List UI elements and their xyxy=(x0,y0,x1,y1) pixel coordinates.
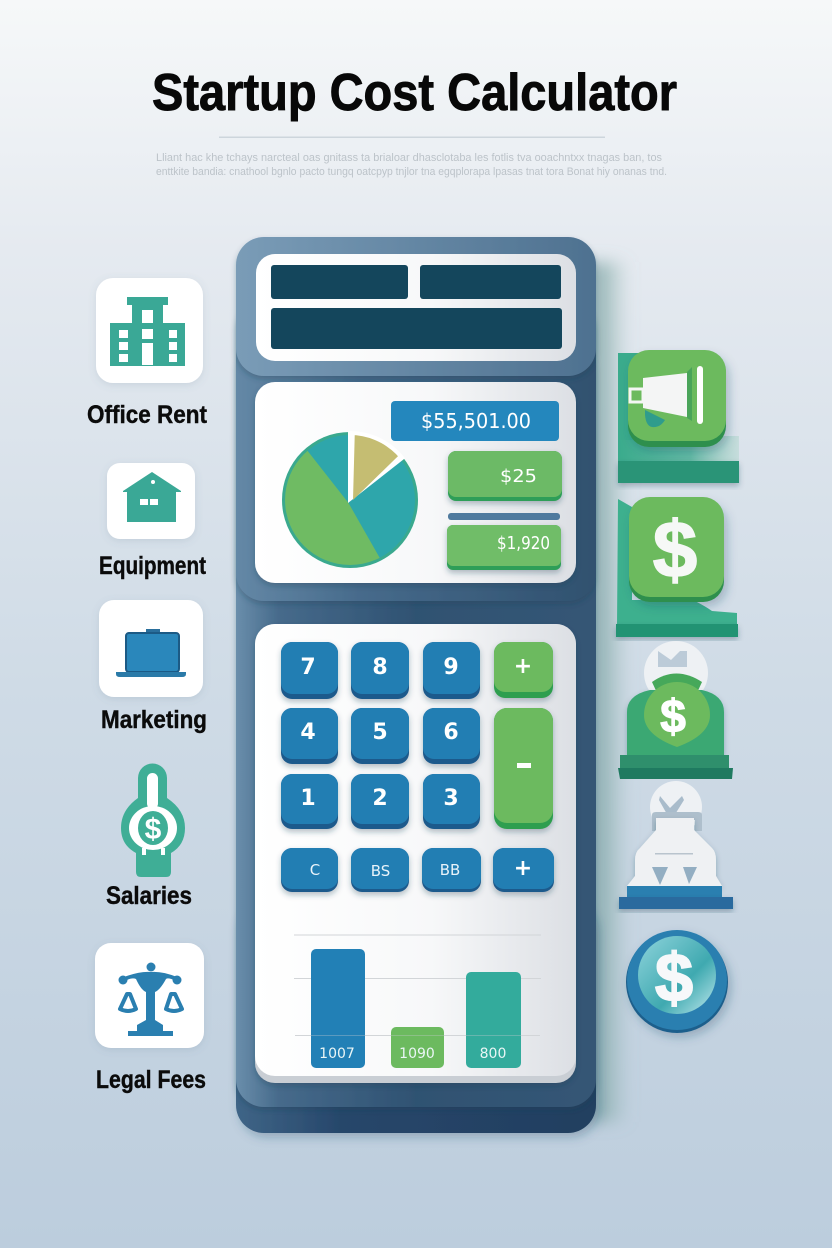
title: Startup Cost Calculator xyxy=(152,64,677,122)
bar chart: 1090 xyxy=(399,1046,435,1062)
keypad: 3 xyxy=(443,786,459,811)
keypad: 9 xyxy=(443,655,459,680)
icon: equipment xyxy=(107,463,195,539)
total value field xyxy=(391,401,559,441)
value button 1 xyxy=(448,451,562,501)
icon: dollar coin xyxy=(626,930,728,1033)
display screen xyxy=(256,254,576,361)
calculator top cap xyxy=(236,237,596,376)
pie chart xyxy=(282,432,418,568)
label: office rent: Office Rent xyxy=(87,401,208,429)
keypad: + xyxy=(514,654,532,679)
icon: bank stand xyxy=(619,781,733,909)
value button 2 xyxy=(447,525,561,570)
subtitle text: Lliant hac khe tchays narcteal oas gnitass ta brialoar dhasclotaba les fotlis tva ooachntxx tnagas ban, tos xyxy=(156,152,662,164)
keypad: 2 xyxy=(372,786,388,811)
label: salaries: Salaries xyxy=(106,882,192,910)
total value field: $55,501.00 xyxy=(421,409,531,433)
keypad: 6 xyxy=(443,720,459,745)
subtitle text: enttkite bandia: cnathool bgnlo pacto tungq oatcpyp tnjlor tna egqplorapa lpasas tnat tora Bonat hiy onanas tnd. xyxy=(156,166,667,178)
keypad: 7 xyxy=(300,655,316,680)
label: legal fees: Legal Fees xyxy=(96,1066,206,1094)
icon: megaphone xyxy=(618,350,739,483)
keypad: 4 xyxy=(300,720,316,745)
value button 2: $1,920 xyxy=(497,533,550,554)
bar chart: 800 xyxy=(480,1046,506,1062)
icon: dollar card xyxy=(616,497,738,637)
icon: legal fees xyxy=(95,943,204,1048)
label: equipment: Equipment xyxy=(99,552,207,580)
keypad: 8 xyxy=(372,655,388,680)
icon: money bag: $ xyxy=(660,690,686,742)
icon: office rent xyxy=(96,278,203,383)
keypad: BB xyxy=(440,861,460,879)
bar chart xyxy=(294,934,541,1068)
bar chart: 1007 xyxy=(319,1046,355,1062)
keypad: 1 xyxy=(300,786,316,811)
label: marketing: Marketing xyxy=(101,706,207,734)
keypad: BS xyxy=(371,862,390,880)
icon: money bag xyxy=(618,641,733,779)
icon: dollar card: $ xyxy=(653,505,697,594)
icon: salaries: $ xyxy=(145,813,162,846)
value button 1: $25 xyxy=(500,466,537,487)
keypad: + xyxy=(514,856,532,881)
icon: dollar coin: $ xyxy=(655,940,693,1016)
icon: marketing xyxy=(99,600,203,697)
keypad xyxy=(281,642,554,892)
keypad: C xyxy=(310,861,320,879)
panel: keypad and bar chart xyxy=(255,624,576,1083)
calculator body xyxy=(236,300,596,1133)
icon: salaries xyxy=(121,764,185,877)
keypad: 5 xyxy=(372,720,388,745)
panel: summary xyxy=(250,382,576,590)
calculator xyxy=(236,237,596,1133)
subtitle text xyxy=(156,152,667,178)
